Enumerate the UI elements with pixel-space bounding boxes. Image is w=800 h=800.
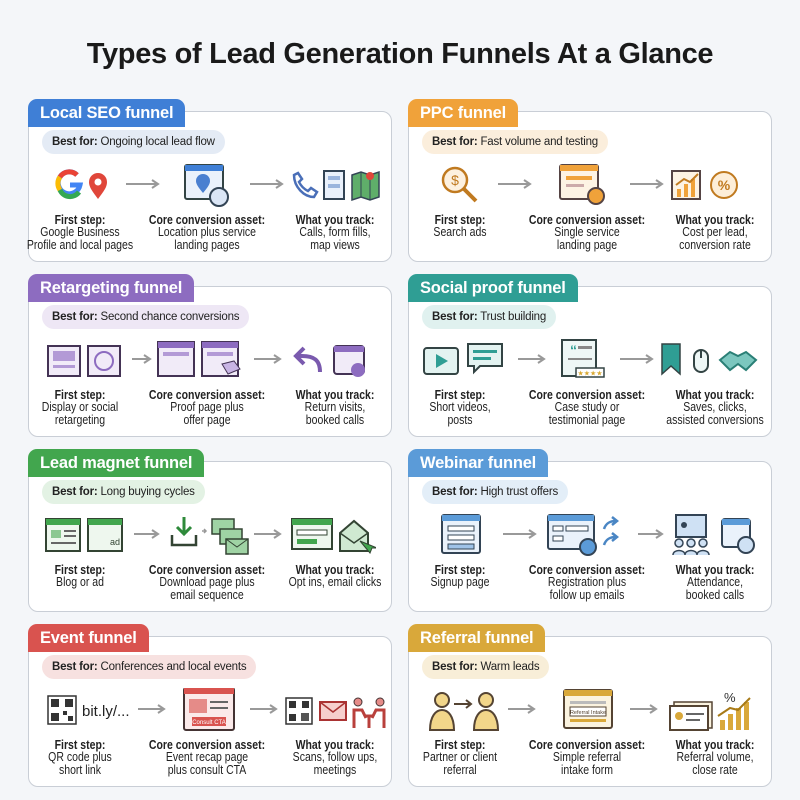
panel: Local SEO funnel: landing pages xyxy=(174,238,240,252)
panel: Retargeting funnel: offer page xyxy=(183,413,231,427)
arrow xyxy=(638,529,664,539)
panel: Local SEO funnel: What you track: xyxy=(296,213,374,227)
labels: posts xyxy=(447,413,473,427)
panel: PPC funnel xyxy=(408,99,772,262)
panel: Retargeting funnel: What you track: xyxy=(296,388,374,402)
icon: blog and ad: ad xyxy=(110,537,120,547)
labels xyxy=(42,388,118,427)
panel: Event funnel: Scans, follow ups, xyxy=(293,750,377,764)
tab: Webinar funnel xyxy=(408,449,548,477)
panel: Event funnel: Event recap page xyxy=(166,750,248,764)
panel: Webinar funnel: booked calls xyxy=(686,588,744,602)
panel: Webinar funnel: Attendance, xyxy=(687,575,743,589)
arrow xyxy=(630,179,664,189)
labels xyxy=(401,564,519,589)
panel: Webinar funnel: Core conversion asset: xyxy=(529,563,645,577)
panel: PPC funnel: Cost per lead, xyxy=(682,225,748,239)
panel: Social proof funnel: What you track: xyxy=(676,388,754,402)
tab: Lead magnet funnel: Lead magnet funnel xyxy=(40,454,192,472)
icon: case study xyxy=(561,339,605,378)
labels: First step: xyxy=(435,563,485,577)
panel: Local SEO funnel xyxy=(27,99,392,262)
arrow xyxy=(630,704,660,714)
panel: Referral funnel: close rate xyxy=(692,763,738,777)
tab: Social proof funnel xyxy=(408,274,578,302)
tab: Retargeting funnel: Retargeting funnel xyxy=(40,279,182,297)
labels xyxy=(401,739,519,776)
icon: chart and percent: % xyxy=(718,177,731,193)
icon: intake form: Referral Intake xyxy=(570,710,606,716)
tab: Local SEO funnel: Local SEO funnel xyxy=(40,104,173,122)
labels: First step: xyxy=(55,563,105,577)
icon: case study: “ xyxy=(570,342,577,358)
arrow xyxy=(254,354,282,364)
labels: Google Business xyxy=(40,225,120,239)
labels: First step: xyxy=(55,388,105,402)
panel: Lead magnet funnel: Download page plus xyxy=(159,575,255,589)
panel: Social proof funnel xyxy=(408,274,772,437)
tab: Lead magnet funnel xyxy=(28,449,204,477)
panel: Social proof funnel: assisted conversions xyxy=(666,413,764,427)
arrow xyxy=(620,354,654,364)
tab: Event funnel: Event funnel xyxy=(40,629,137,647)
icon: google and pin xyxy=(55,169,107,200)
labels: short link xyxy=(59,763,101,777)
panel: Lead magnet funnel xyxy=(28,449,392,612)
pill: best for: Best for: Ongoing local lead flow xyxy=(52,136,215,148)
labels: referral xyxy=(443,763,477,777)
panel: Retargeting funnel xyxy=(28,274,392,437)
labels: Display or social xyxy=(42,400,118,414)
pill: best for: Best for: Warm leads xyxy=(432,661,539,673)
panel: Lead magnet funnel: Opt ins, email clicks xyxy=(289,575,381,589)
arrow xyxy=(250,179,284,189)
tab: Event funnel xyxy=(28,624,149,652)
pill: best for xyxy=(422,655,549,679)
icon: search ads: $ xyxy=(451,172,459,188)
pill: best for: Best for: Long buying cycles xyxy=(52,486,195,498)
icon: scans mail meeting xyxy=(284,688,388,732)
panel: Social proof funnel: Saves, clicks, xyxy=(683,400,747,414)
pill: best for: Best for: High trust offers xyxy=(432,486,558,498)
panel: Local SEO funnel: map views xyxy=(310,238,360,252)
icon: signup page xyxy=(441,514,481,554)
pill: best for xyxy=(422,305,556,329)
tab: Local SEO funnel xyxy=(28,99,185,127)
panel: Event funnel: plus consult CTA xyxy=(168,763,246,777)
pill: best for xyxy=(42,305,249,329)
pill: best for xyxy=(42,480,205,504)
pill: best for xyxy=(42,655,256,679)
panel: Referral funnel: Simple referral xyxy=(553,750,621,764)
panel: Webinar funnel: What you track: xyxy=(676,563,754,577)
panel: Referral funnel xyxy=(408,624,772,788)
labels: Signup page xyxy=(431,575,489,589)
icon: bookmark mouse handshake xyxy=(661,343,758,376)
panel: PPC funnel: landing page xyxy=(557,238,617,252)
arrow xyxy=(508,704,538,714)
icon: event recap page: Consult CTA xyxy=(192,720,226,726)
panel: Lead magnet funnel: email sequence xyxy=(170,588,244,602)
panel: Referral funnel: What you track: xyxy=(676,738,754,752)
labels xyxy=(429,388,491,427)
labels: Search ads xyxy=(433,225,487,239)
icon: volume and close rate xyxy=(666,688,756,732)
arrow xyxy=(250,704,280,714)
labels: Profile and local pages xyxy=(27,238,133,252)
icon: proof pages xyxy=(157,341,241,377)
labels: Partner or client xyxy=(423,750,497,764)
panel: PPC funnel: What you track: xyxy=(676,213,754,227)
labels xyxy=(21,739,139,776)
tab: Retargeting funnel xyxy=(28,274,194,302)
arrow xyxy=(126,179,160,189)
icon: video and post xyxy=(423,343,503,375)
panel: Retargeting funnel: Return visits, xyxy=(305,400,365,414)
panel: Webinar funnel: follow up emails xyxy=(550,588,624,602)
icon: display ads xyxy=(47,345,121,377)
panel: Lead magnet funnel: Core conversion asset: xyxy=(149,563,265,577)
icon: QR and short link: bit.ly/... xyxy=(82,703,130,720)
icon: return and calendar xyxy=(293,345,365,377)
icon: search ads xyxy=(442,166,478,202)
labels: First step: xyxy=(435,738,485,752)
labels: First step: xyxy=(55,213,105,227)
pill: best for xyxy=(422,480,568,504)
labels xyxy=(27,213,133,252)
icon: volume and close rate: % xyxy=(724,690,736,705)
labels: First step: xyxy=(435,213,485,227)
panel: Event funnel: meetings xyxy=(314,763,356,777)
labels: Blog or ad xyxy=(56,575,104,589)
labels: First step: xyxy=(55,738,105,752)
panel: Webinar funnel: Registration plus xyxy=(548,575,626,589)
panel: PPC funnel: Single service xyxy=(554,225,620,239)
icon: opt in and email click xyxy=(291,518,376,554)
tab: Referral funnel: Referral funnel xyxy=(420,629,533,647)
panel: Retargeting funnel: Core conversion asset: xyxy=(149,388,265,402)
panel: Event funnel: Core conversion asset: xyxy=(149,738,265,752)
pill: best for: Best for: Conferences and local events xyxy=(52,661,246,673)
tab: PPC funnel xyxy=(408,99,518,127)
icon: intake form xyxy=(562,688,614,732)
panel: Referral funnel: intake form xyxy=(561,763,613,777)
tab: PPC funnel: PPC funnel xyxy=(420,104,506,122)
pill: best for xyxy=(422,130,608,154)
panel: Referral funnel: Core conversion asset: xyxy=(529,738,645,752)
panel: Social proof funnel: Core conversion asset: xyxy=(529,388,645,402)
panel: Referral funnel: Referral volume, xyxy=(676,750,754,764)
pill: best for: Best for: Fast volume and testing xyxy=(432,136,598,148)
panel: Event funnel: What you track: xyxy=(296,738,374,752)
icon: partner referral xyxy=(428,688,502,732)
tab: Referral funnel xyxy=(408,624,545,652)
arrow xyxy=(503,529,537,539)
arrow xyxy=(134,529,160,539)
labels: Short videos, xyxy=(429,400,491,414)
panel: Retargeting funnel: Proof page plus xyxy=(170,400,244,414)
icon: landing page xyxy=(559,164,605,205)
icon: location landing page xyxy=(184,164,229,207)
arrow xyxy=(498,179,532,189)
panel: Lead magnet funnel: What you track: xyxy=(296,563,374,577)
tab: Social proof funnel: Social proof funnel xyxy=(420,279,566,297)
panel: Local SEO funnel: Core conversion asset: xyxy=(149,213,265,227)
icon: registration with emails xyxy=(547,514,619,556)
pill: best for: Best for: Trust building xyxy=(432,311,546,323)
icon: chart and percent xyxy=(671,170,738,200)
arrow xyxy=(518,354,546,364)
labels: retargeting xyxy=(55,413,105,427)
panel: PPC funnel: conversion rate xyxy=(679,238,751,252)
labels: First step: xyxy=(435,388,485,402)
icon: phone form map xyxy=(292,170,380,201)
panel: Webinar funnel xyxy=(408,449,772,612)
panel: Event funnel xyxy=(28,624,392,788)
labels: QR code plus xyxy=(48,750,112,764)
icon: attendance and calendar xyxy=(670,513,760,557)
icon: event recap page xyxy=(182,688,236,732)
icon: download and emails xyxy=(170,517,249,555)
tab: Webinar funnel: Webinar funnel xyxy=(420,454,536,472)
panel: Social proof funnel: testimonial page xyxy=(549,413,625,427)
pill: best for: Best for: Second chance conversions xyxy=(52,311,239,323)
title: Types of Lead Generation Funnels At a Glance xyxy=(87,38,713,70)
labels xyxy=(433,213,487,239)
arrow xyxy=(132,354,152,364)
panel: Social proof funnel: Case study or xyxy=(555,400,619,414)
icon: case study: ★★★★ xyxy=(577,370,603,378)
icon: blog and ad xyxy=(45,518,123,552)
panel: PPC funnel: Core conversion asset: xyxy=(529,213,645,227)
icon: QR and short link xyxy=(44,688,134,732)
arrow xyxy=(138,704,168,714)
panel: Local SEO funnel: Calls, form fills, xyxy=(299,225,371,239)
panel: Local SEO funnel: Location plus service xyxy=(158,225,256,239)
pill: best for xyxy=(42,130,225,154)
arrow xyxy=(254,529,282,539)
labels xyxy=(55,563,105,589)
panel: Retargeting funnel: booked calls xyxy=(306,413,364,427)
